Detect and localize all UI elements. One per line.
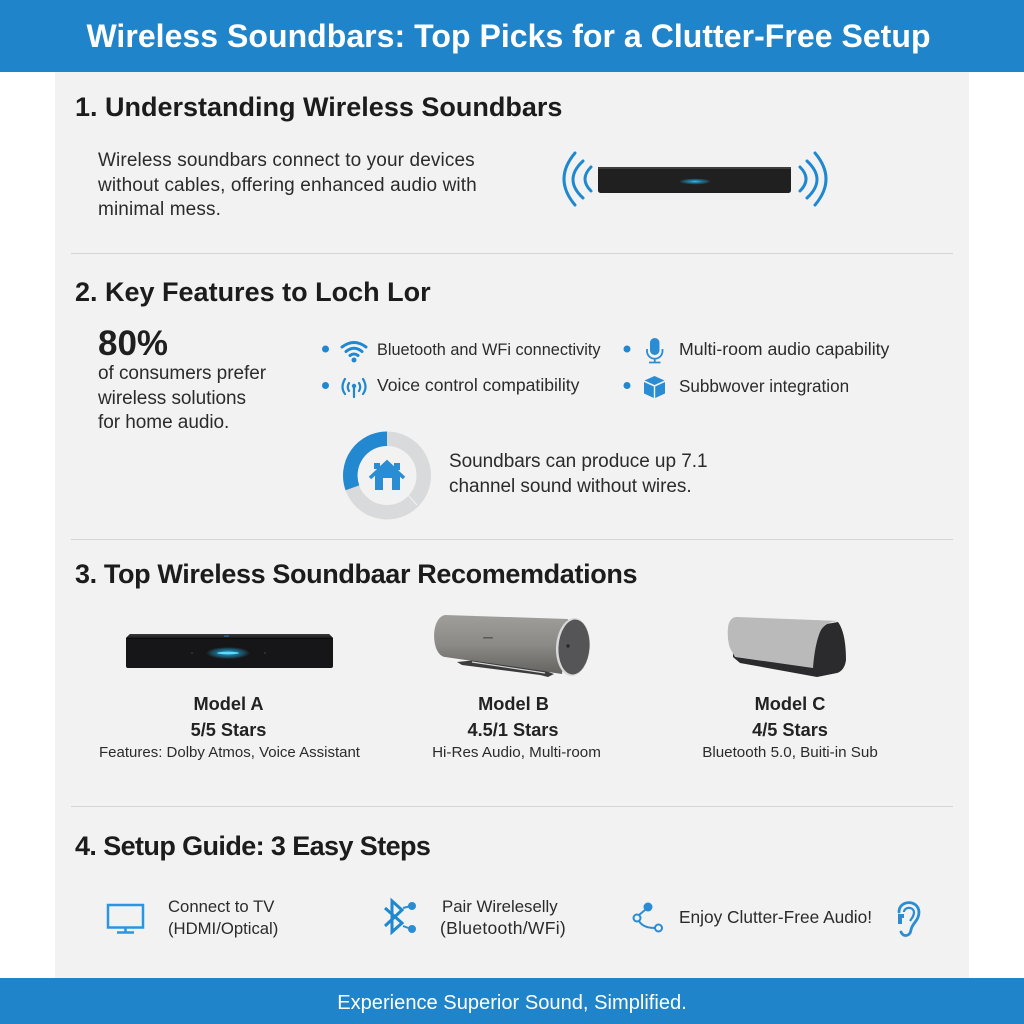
text: section 1 description [98, 150, 477, 220]
label: Bluetooth and WFi connectivity [377, 341, 601, 359]
icon: soundbar with wireless waves [562, 151, 828, 207]
label [168, 897, 278, 938]
heading: section 1: 1. Understanding Wireless Soundbars [75, 92, 562, 122]
icon: microphone [624, 338, 664, 364]
product: Model B [432, 615, 601, 761]
label: Multi-room audio capability [679, 339, 889, 359]
stat caption: for home audio. [98, 412, 229, 433]
feature: Multi-room audio [624, 338, 890, 364]
stat caption [98, 363, 266, 433]
image: fabric speaker [728, 617, 846, 677]
rating: 4.5/1 Stars [468, 720, 558, 740]
feature: Bluetooth and WiFi [322, 341, 601, 362]
icon: TV [106, 904, 144, 934]
icon: bluetooth [384, 898, 416, 936]
rating: 5/5 Stars [191, 720, 266, 740]
text: 7.1 channel callout [449, 451, 707, 496]
label: (HDMI/Optical) [168, 918, 278, 938]
stat caption: of consumers prefer [98, 363, 266, 384]
feature: Voice control [322, 375, 580, 398]
label: Voice control compatibility [377, 375, 579, 395]
icon: cube [624, 376, 665, 398]
stat: 80 percent of consumers [98, 324, 266, 433]
footer banner [0, 978, 1024, 1024]
product: Model C [702, 617, 878, 761]
step 3: enjoy audio [632, 901, 920, 937]
features: Hi-Res Audio, Multi-room [432, 744, 601, 761]
heading: section 3: 3. Top Wireless Soundbaar Recomemdations [75, 559, 637, 589]
model name: Model A [193, 694, 264, 714]
text: 7.1 channel callout: channel sound without wires. [449, 476, 692, 496]
content panel background [55, 72, 969, 978]
text: 7.1 channel callout: Soundbars can produce up 7.1 [449, 451, 707, 472]
stat number: 80% [98, 324, 168, 363]
icon: share nodes [632, 902, 663, 932]
label: Subbwover integration [679, 376, 849, 396]
text: section 1 description: minimal mess. [98, 199, 221, 220]
step 1: connect to TV [106, 897, 278, 938]
text: section 1 description: without cables, offering enhanced audio with [98, 174, 477, 196]
heading: section 2: 2. Key Features to Loch Lor [75, 277, 431, 307]
icon: voice signal [322, 378, 367, 398]
image: silver cylinder speaker [434, 615, 590, 677]
title banner [0, 0, 1024, 72]
product: Model A [99, 634, 360, 761]
stat caption: wireless solutions [98, 388, 246, 408]
label: Connect to TV [168, 897, 274, 916]
heading: section 4: 4. Setup Guide: 3 Easy Steps [75, 831, 430, 861]
title banner: Wireless Soundbars: Top Picks for a Clutter-Free Setup [86, 18, 931, 54]
label line 2: (Bluetooth/WFi) [440, 918, 566, 938]
chart: donut with home icon [343, 432, 431, 520]
feature: Subwoofer [624, 376, 849, 398]
text: section 1 description: Wireless soundbars connect to your devices [98, 150, 475, 171]
step 2: pair wirelessly [384, 897, 566, 938]
label: Pair Wireleselly [442, 897, 558, 916]
rating: 4/5 Stars [752, 720, 828, 740]
image: black soundbar [126, 634, 333, 668]
icon: ear [898, 901, 920, 937]
model name: Model C [755, 694, 825, 714]
features: Bluetooth 5.0, Buiti-in Sub [702, 744, 878, 761]
label: Enjoy Clutter-Free Audio! [679, 907, 872, 927]
icon: wifi [322, 341, 368, 362]
footer banner: Experience Superior Sound, Simplified. [337, 992, 687, 1014]
features: Features: Dolby Atmos, Voice Assistant [99, 744, 360, 761]
icon: house [370, 462, 404, 490]
model name: Model B [478, 694, 549, 714]
